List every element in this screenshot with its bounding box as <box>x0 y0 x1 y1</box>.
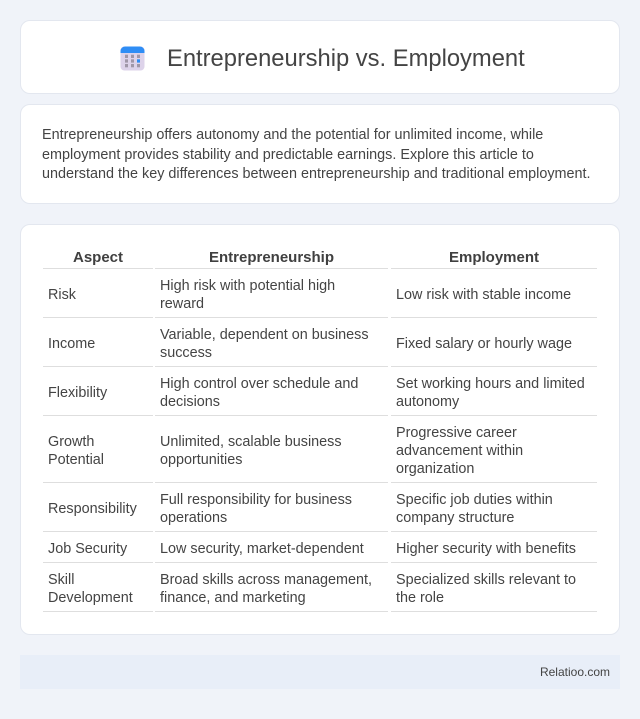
row: Job Security: Job Security <box>48 541 127 557</box>
responsibility: employment: Specific job duties within <box>396 492 553 508</box>
risk: employment: Low risk with stable income <box>396 287 571 303</box>
risk: entrepreneurship: reward <box>160 296 204 312</box>
skill: employment <box>396 572 576 606</box>
income: entrepreneurship: Variable, dependent on business <box>160 327 369 343</box>
title: Entrepreneurship vs. Employment <box>167 45 525 72</box>
growth: employment: organization <box>396 461 474 477</box>
skill: employment: the role <box>396 590 444 606</box>
job security: entrepreneurship: Low security, market-dependent <box>160 541 364 557</box>
footer credit: Relatioo.com <box>540 665 610 679</box>
footer bar <box>20 655 620 689</box>
growth: employment: Progressive career <box>396 425 517 441</box>
panel: introduction <box>20 104 620 204</box>
job security: employment: Higher security with benefits <box>396 541 576 557</box>
responsibility: entrepreneurship: Full responsibility for business <box>160 492 352 508</box>
row: Growth Potential: Growth <box>48 434 94 450</box>
growth: entrepreneurship <box>160 434 342 468</box>
responsibility: entrepreneurship <box>160 492 352 526</box>
flexibility: employment: autonomy <box>396 394 459 410</box>
risk: entrepreneurship: High risk with potential high <box>160 278 335 294</box>
responsibility: employment <box>396 492 553 526</box>
growth: entrepreneurship: opportunities <box>160 452 242 468</box>
skill: entrepreneurship: finance, and marketing <box>160 590 306 606</box>
flexibility: employment <box>396 376 585 410</box>
table header: Entrepreneurship: Entrepreneurship <box>209 249 334 266</box>
icon: calendar <box>120 46 144 70</box>
panel: comparison table <box>20 224 620 635</box>
row: Income: Income <box>48 336 95 352</box>
row: Growth Potential: Potential <box>48 452 104 468</box>
growth: employment <box>396 425 523 477</box>
flexibility: entrepreneurship: High control over schedule and <box>160 376 358 392</box>
row: Flexibility: Flexibility <box>48 385 107 401</box>
row: Responsibility: Responsibility <box>48 501 137 517</box>
growth: employment: advancement within <box>396 443 523 459</box>
panel: title card <box>20 20 620 94</box>
text block: introduction: Entrepreneurship offers autonomy and the potential for unlimited income, while <box>42 127 543 143</box>
row: Skill Development: Development <box>48 590 133 606</box>
risk: entrepreneurship <box>160 278 335 312</box>
skill: entrepreneurship: Broad skills across management, <box>160 572 372 588</box>
row: Skill Development <box>48 572 133 606</box>
flexibility: employment: Set working hours and limited <box>396 376 585 392</box>
text block: introduction: employment provides stability and predictable earnings. Explore this article to <box>42 146 534 162</box>
skill: entrepreneurship <box>160 572 372 606</box>
table header: Employment: Employment <box>449 249 539 266</box>
growth: entrepreneurship: Unlimited, scalable business <box>160 434 342 450</box>
responsibility: entrepreneurship: operations <box>160 510 227 526</box>
income: entrepreneurship: success <box>160 345 212 361</box>
row: Growth Potential <box>48 434 104 468</box>
flexibility: entrepreneurship: decisions <box>160 394 220 410</box>
income: employment: Fixed salary or hourly wage <box>396 336 572 352</box>
responsibility: employment: company structure <box>396 510 514 526</box>
text block: introduction <box>42 127 591 182</box>
income: entrepreneurship <box>160 327 369 361</box>
table header: Aspect: Aspect <box>73 249 123 266</box>
flexibility: entrepreneurship <box>160 376 358 410</box>
text block: introduction: understand the key differences between entrepreneurship and traditional employment. <box>42 166 591 182</box>
skill: employment: Specialized skills relevant to <box>396 572 576 588</box>
row: Risk: Risk <box>48 287 76 303</box>
row: Skill Development: Skill <box>48 572 74 588</box>
